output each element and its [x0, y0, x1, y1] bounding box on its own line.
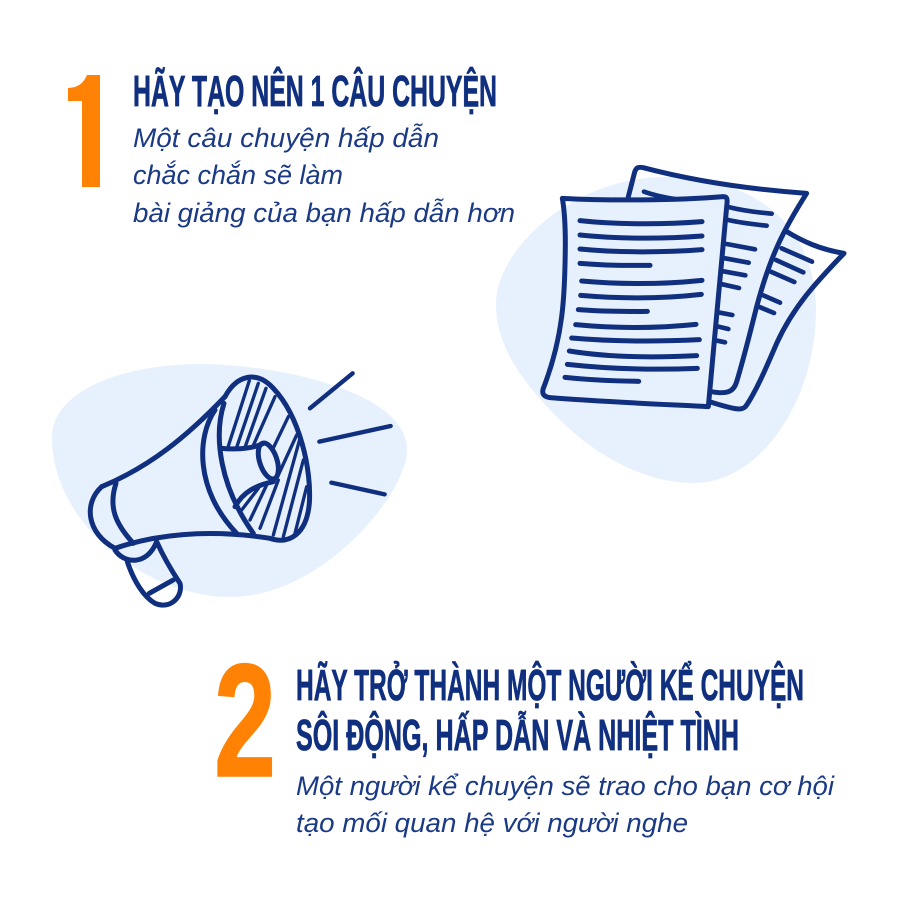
hatching	[228, 381, 307, 537]
heading 2	[296, 659, 804, 760]
step 1 block	[68, 66, 514, 228]
front page text lines	[565, 221, 702, 381]
back page	[628, 167, 807, 393]
body text 1: chắc chắn sẽ làm	[133, 159, 343, 190]
icon: documents	[543, 167, 844, 409]
back page text lines	[644, 192, 772, 342]
third page text lines	[759, 248, 812, 313]
front page	[543, 197, 727, 407]
megaphone back	[90, 483, 133, 548]
body text 2	[296, 771, 835, 838]
speaker cone	[222, 441, 282, 507]
icon: megaphone	[90, 373, 391, 605]
megaphone handle	[115, 542, 181, 605]
background blob: documents	[496, 177, 816, 483]
sound rays	[310, 373, 391, 494]
body text 1: bài giảng của bạn hấp dẫn hơn	[133, 198, 515, 228]
number 1: 1	[52, 39, 122, 222]
third page	[712, 232, 844, 409]
megaphone rim	[203, 403, 253, 533]
body text 1: Một câu chuyện hấp dẫn	[133, 123, 439, 153]
body text 1	[133, 123, 515, 228]
heading 1: HÃY TẠO NÊN 1 CÂU CHUYỆN	[133, 66, 497, 116]
megaphone cone	[102, 397, 270, 548]
background blob: megaphone	[52, 364, 407, 597]
megaphone mouth	[225, 377, 310, 540]
step 2 block	[214, 631, 835, 838]
body text 2: Một người kể chuyện sẽ trao cho bạn cơ hội	[296, 771, 835, 801]
body text 2: tạo mối quan hệ với người nghe	[296, 808, 688, 838]
number 2: 2	[214, 631, 276, 811]
